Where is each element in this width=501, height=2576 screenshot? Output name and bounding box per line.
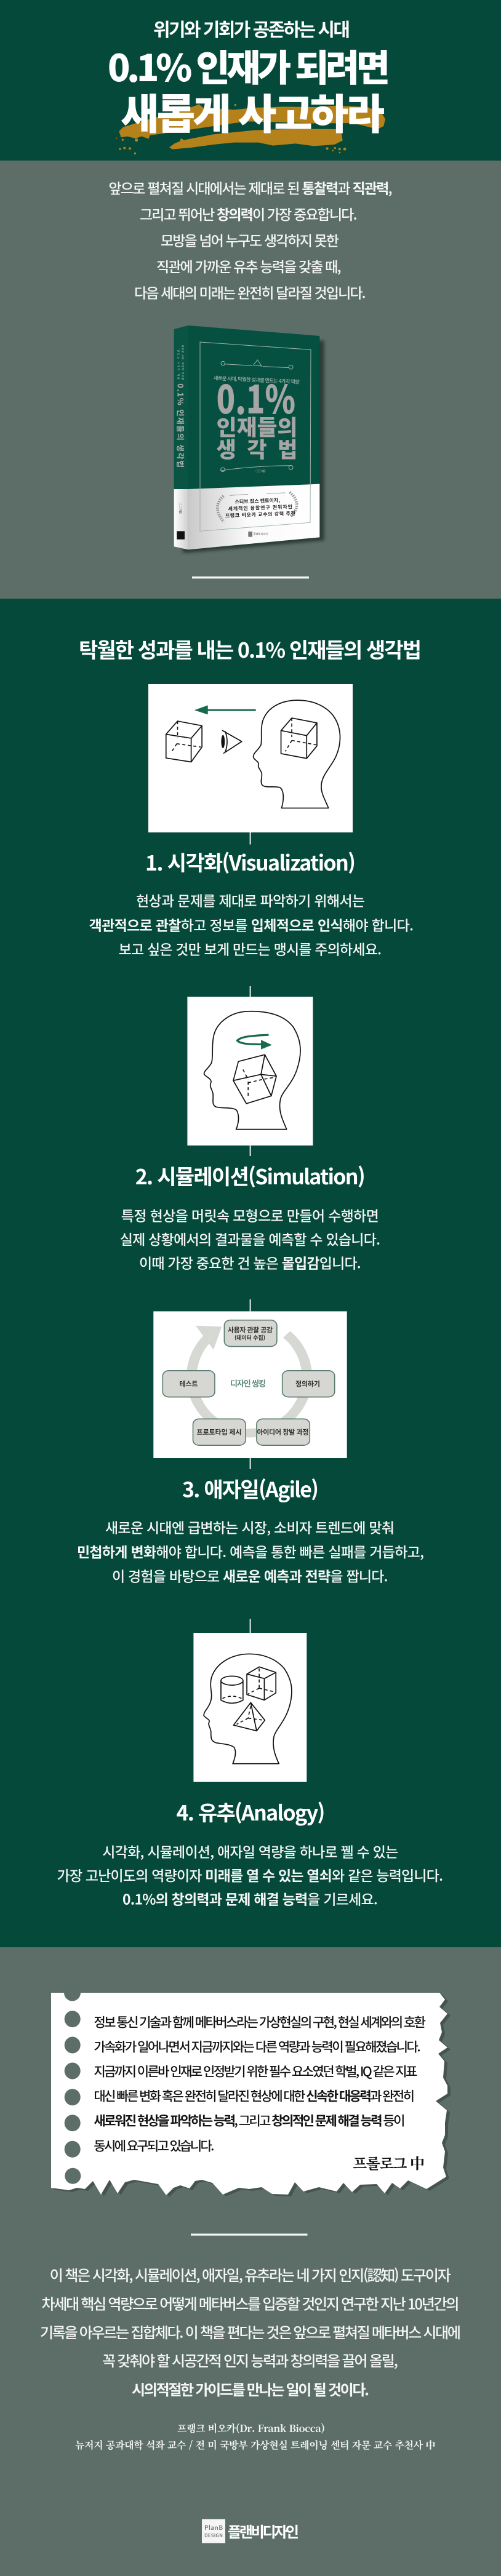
book mockup: 생 각 법 [217,433,297,464]
illustration 3: design thinking cycle: 프로토타입 제시 [197,1427,241,1437]
closing text: 꼭 갖춰야 할 시공간적 인지 능력과 창의력을 끌어 올릴, [102,2349,398,2371]
method 4 title: 4. 유추(Analogy) [176,1796,325,1827]
book mockup: 새로운 시대, 탁월한 성과를 만드는 4가지 역량 [214,374,300,386]
method 2 text: 실제 상황에서의 결과물을 예측할 수 있습니다. [120,1228,380,1249]
book mockup: 0.1% 인재들의 생각법 [175,383,186,468]
panel: hero title [0,0,501,161]
method 2 text: 이때 가장 중요한 건 높은 몰입감입니다. [139,1252,361,1273]
connector [250,986,251,997]
illustration 3: design thinking cycle: 디자인 씽킹 [230,1377,266,1389]
intro text: 그리고 뛰어난 창의력이 가장 중요합니다. [140,203,357,224]
brush stroke accent [116,104,385,154]
illustration 3: design thinking cycle: (데이터 수집) [234,1334,265,1341]
method 3 title: 3. 애자일(Agile) [182,1473,319,1504]
method 4 text: 가장 고난이도의 역량이자 미래를 열 수 있는 열쇠와 같은 능력입니다. [57,1864,443,1885]
intro text: 앞으로 펼쳐질 시대에서는 제대로 된 통찰력과 직관력, [108,177,393,198]
prologue text: 동시에 요구되고 있습니다. [94,2136,214,2155]
prologue text: 새로워진 현상을 파악하는 능력, 그리고 창의적인 문제 해결 능력 등이 [94,2111,405,2130]
book mockup: 0.1% [217,369,295,425]
prologue text [94,2013,426,2155]
method 4 text [57,1841,443,1908]
illustration 2: simulation [187,997,313,1146]
section heading: 탁월한 성과를 내는 0.1% 인재들의 생각법 [79,634,422,664]
connector [250,1146,251,1156]
book mockup: 만드는 4가지 역량 [177,349,181,380]
connector [250,1299,251,1311]
illustration 3: design thinking cycle: 테스트 [180,1379,198,1389]
panel: four thinking methods [0,599,501,1947]
method 1 text: 객관적으로 관찰하고 정보를 입체적으로 인식해야 합니다. [89,914,414,935]
panel: intro and book [0,161,501,599]
method 1 text: 현상과 문제를 제대로 파악하기 위해서는 [136,890,365,911]
book mockup [174,325,324,552]
panel: closing section [0,1947,501,2576]
book mockup: ○○○ 지음 [255,469,266,474]
method 1 text: 보고 싶은 것만 보게 만드는 맹시를 주의하세요. [119,938,382,959]
connector [250,1619,251,1633]
closing text: 차세대 핵심 역량으로 어떻게 메타버스를 입증할 것인지 연구한 지난 10년간의 [42,2292,459,2313]
illustration 3: design thinking cycle: 아이디어 창발 과정 [257,1427,309,1437]
closing text: 기록을 아우르는 집합체다. 이 책을 편다는 것은 앞으로 펼쳐질 메타버스 시대에 [40,2321,461,2342]
method 1 text [89,890,414,959]
method 3 text: 민첩하게 변화해야 합니다. 예측을 통한 빠른 실패를 거듭하고, [77,1541,424,1561]
endorser attribution [75,2421,436,2452]
prologue text: 가속화가 일어나면서 지금까지와는 다른 역량과 능력이 필요해졌습니다. [94,2038,421,2056]
illustration 3: design thinking cycle [153,1311,347,1458]
method 3 text [77,1517,424,1586]
prologue text: 지금까지 이른바 인재로 인정받기 위한 필수 요소였던 학벌, IQ 같은 지표 [94,2062,417,2081]
publisher logo: 플랜비디자인 [228,2520,299,2542]
intro text [108,177,393,303]
book mockup: 세계적인 융합연구 권위자인 [228,503,292,512]
torn paper note [51,1993,451,2197]
method 2 text: 특정 현상을 머릿속 모형으로 만들어 수행하면 [121,1205,379,1226]
closing text [40,2263,461,2399]
book mockup: 프랭크 비오카 교수의 강력 추천 [225,510,295,519]
publisher logo [202,2519,299,2543]
publisher logo: PlanB [204,2522,223,2532]
book mockup: 새로운 시대, 탁월한 성과를 [180,345,185,380]
closing text: 이 책은 시각화, 시뮬레이션, 애자일, 유추라는 네 가지 인지(認知) 도구이자 [50,2263,451,2285]
illustration 3: design thinking cycle: 정의하기 [295,1379,320,1389]
endorser attribution: 프랭크 비오카(Dr. Frank Biocca) [177,2421,325,2435]
method 4 text: 시각화, 시뮬레이션, 애자일 역량을 하나로 꿸 수 있는 [102,1841,398,1862]
prologue text: 정보 통신 기술과 함께 메타버스라는 가상현실의 구현, 현실 세계와의 호환 [94,2013,426,2032]
prologue source: 프롤로그 中 [353,2151,425,2173]
book mockup: ○○○ 지음 [178,503,182,514]
endorser attribution: 뉴저지 공과대학 석좌 교수 / 전 미 국방부 가상현실 트레이닝 센터 자문 교수 추천사 中 [75,2438,436,2452]
title line 2: 새롭게 사고하라 [121,81,385,142]
closing text: 시의적절한 가이드를 만나는 일이 될 것이다. [132,2378,369,2399]
method 3 text: 이 경험을 바탕으로 새로운 예측과 전략을 짭니다. [112,1565,388,1586]
publisher logo: DESIGN [204,2532,223,2539]
connector [250,832,251,844]
intro text: 모방을 넘어 누구도 생각하지 못한 [161,229,339,250]
method 2 title: 2. 시뮬레이션(Simulation) [135,1160,366,1190]
intro text: 다음 세대의 미래는 완전히 달라질 것입니다. [134,282,366,303]
illustration 3: design thinking cycle: 사용자 관찰 공감 [228,1325,273,1335]
method 4 text: 0.1%의 창의력과 문제 해결 능력을 기르세요. [122,1888,378,1908]
book mockup: 플랜비디자인 [254,532,268,536]
title line 1: 0.1% 인재가 되려면 [108,39,390,92]
intro text: 직관에 가까운 유추 능력을 갖출 때, [156,255,341,276]
divider rule [191,2233,308,2236]
method 2 text [120,1205,380,1273]
connector [250,1458,251,1469]
subtitle: 위기와 기회가 공존하는 시대 [153,15,350,42]
method 1 title: 1. 시각화(Visualization) [145,847,356,877]
divider rule [192,576,309,578]
illustration 1: visualization [148,684,353,832]
prologue text: 대신 빠른 변화 혹은 완전히 달라진 현상에 대한 신속한 대응력과 완전히 [94,2087,415,2105]
method 3 text: 새로운 시대엔 급변하는 시장, 소비자 트렌드에 맞춰 [105,1517,395,1537]
book mockup: 스티브 잡스 멘토이자, [234,497,280,505]
illustration 4: analogy [193,1633,307,1782]
book mockup: 인재들의 [217,410,297,442]
